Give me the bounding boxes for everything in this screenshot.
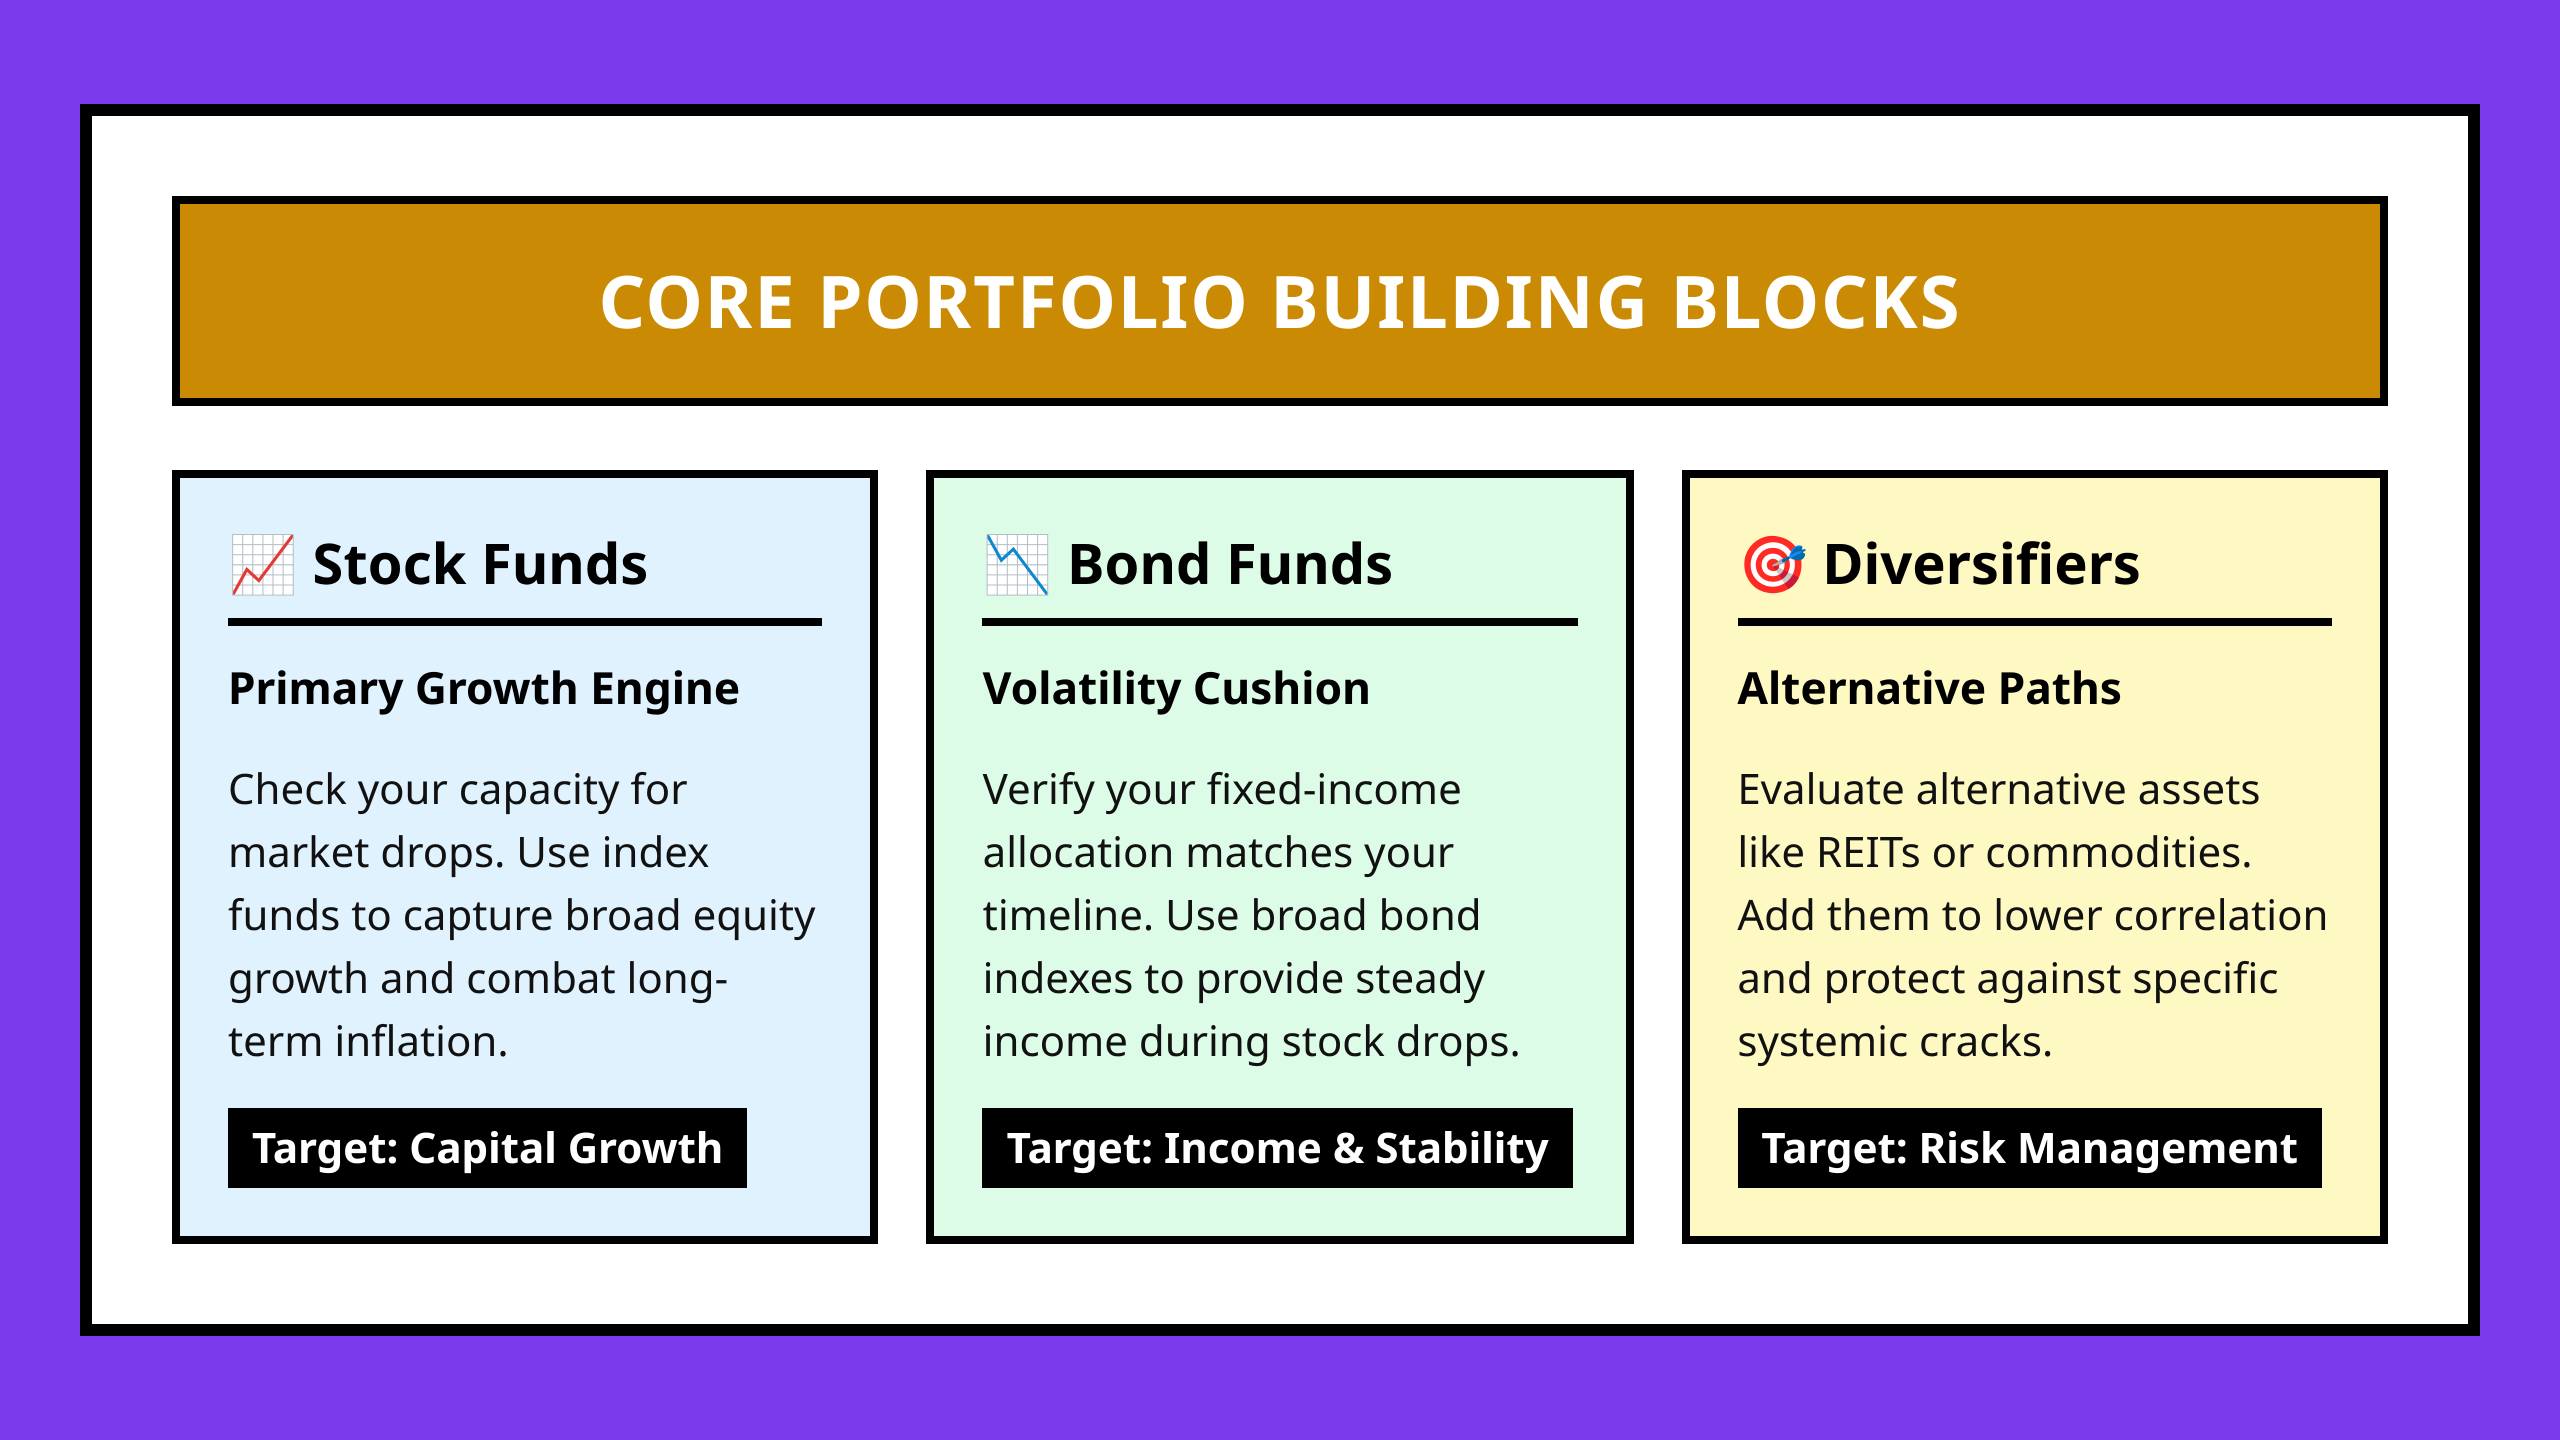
text: stock funds description: term inflation. (228, 1012, 509, 1069)
heading: bond funds: 📉 Bond Funds (983, 525, 1393, 601)
panel: diversifiers (1682, 470, 2388, 1244)
text: bond funds description: Verify your fixed-income (983, 760, 1462, 817)
subheading: primary growth engine: Primary Growth Engine (228, 657, 740, 717)
text: bond funds description: income during stock drops. (983, 1012, 1521, 1069)
tag: capital growth: Target: Capital Growth (252, 1119, 723, 1176)
text: diversifiers description: systemic cracks. (1737, 1012, 2053, 1069)
subheading: volatility cushion: Volatility Cushion (983, 657, 1371, 717)
text: stock funds description: market drops. Use index (228, 823, 709, 880)
text: bond funds description (982, 760, 1521, 1069)
title banner (172, 196, 2388, 406)
text: diversifiers description: like REITs or commodities. (1737, 823, 2253, 880)
text: bond funds description: allocation matches your (983, 823, 1454, 880)
tag: income and stability (982, 1108, 1573, 1188)
heading: stock funds: 📈 Stock Funds (228, 525, 648, 601)
text: bond funds description: indexes to provide steady (983, 949, 1485, 1006)
text: stock funds description: growth and combat long- (228, 949, 728, 1006)
heading: stock funds (228, 526, 822, 626)
panel: bond funds (926, 470, 1634, 1244)
text: diversifiers description (1737, 760, 2328, 1069)
heading: diversifiers (1738, 526, 2332, 626)
text: diversifiers description: Add them to lower correlation (1737, 886, 2328, 943)
text: stock funds description (228, 760, 816, 1069)
text: diversifiers description: Evaluate alternative assets (1737, 760, 2261, 817)
title banner: CORE PORTFOLIO BUILDING BLOCKS (599, 251, 1961, 350)
panel: stock funds (172, 470, 878, 1244)
text: bond funds description: timeline. Use broad bond (983, 886, 1482, 943)
tag: risk management (1738, 1108, 2322, 1188)
tag: risk management: Target: Risk Management (1761, 1119, 2298, 1176)
tag: income and stability: Target: Income & Stability (1007, 1119, 1549, 1176)
text: diversifiers description: and protect against specific (1737, 949, 2278, 1006)
heading: diversifiers: 🎯 Diversifiers (1738, 525, 2141, 601)
text: stock funds description: funds to capture broad equity (228, 886, 815, 943)
subheading: alternative paths: Alternative Paths (1737, 657, 2122, 717)
text: stock funds description: Check your capacity for (228, 760, 688, 817)
tag: capital growth (228, 1108, 747, 1188)
heading: bond funds (982, 526, 1578, 626)
